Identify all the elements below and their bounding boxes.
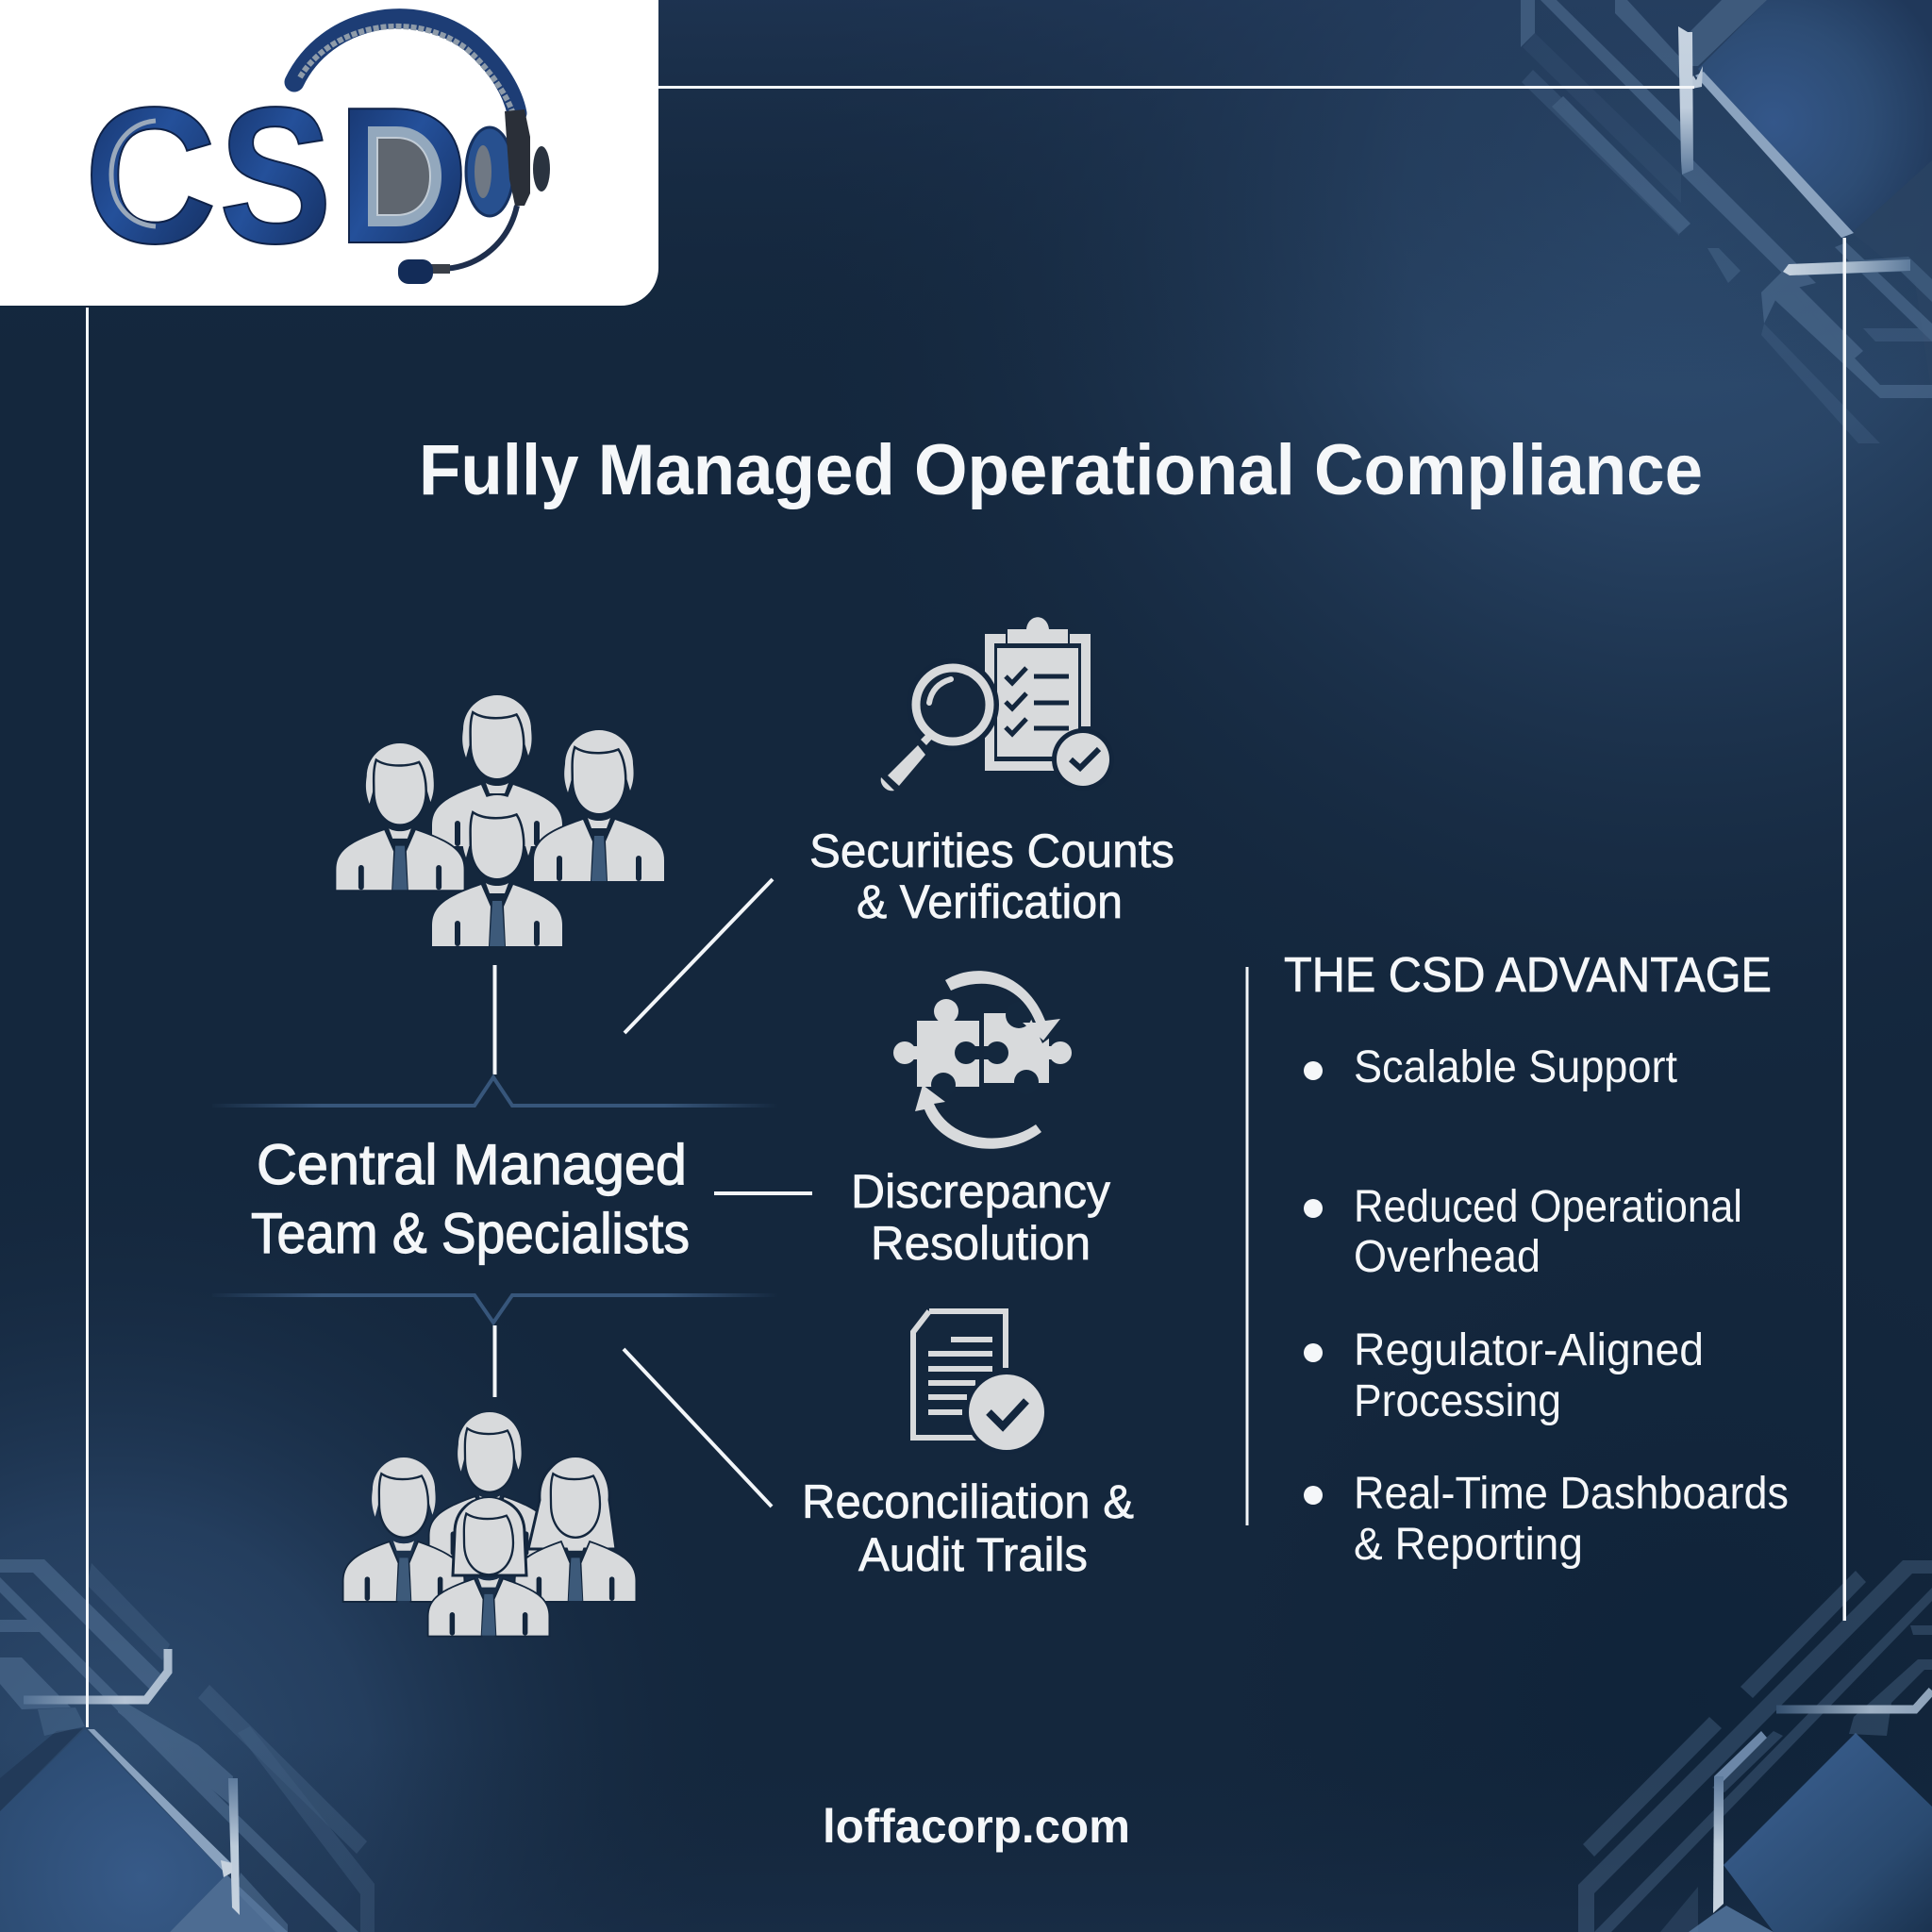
center label (251, 1133, 690, 1265)
bracket: center top (212, 1077, 778, 1106)
label: securities: & Verification (857, 875, 1123, 928)
connector: top team to center (492, 965, 496, 1074)
connector: center to discrepancy (714, 1191, 812, 1195)
center label: Team & Specialists (251, 1202, 690, 1265)
list item: dashboards: Real-Time Dashboards (1354, 1469, 1789, 1519)
title: Fully Managed Operational Compliance (419, 430, 1703, 510)
logo: D counter overlay (368, 126, 441, 226)
connector: center to bottom team (492, 1325, 496, 1397)
icon: clipboard and magnifier (881, 617, 1114, 791)
list item: regulator aligned (1304, 1325, 1704, 1426)
label: reconciliation: Reconciliation & (802, 1475, 1134, 1528)
list item: regulator aligned: Regulator-Aligned (1354, 1325, 1704, 1375)
corner decoration: top right (1521, 0, 1932, 443)
icon: team group bottom (344, 1412, 635, 1636)
corner decoration: bottom right (1578, 1560, 1932, 1932)
logo: CSD letters (84, 67, 469, 284)
list item: reduced overhead: Overhead (1354, 1232, 1541, 1282)
logo: mic (398, 206, 517, 284)
list item: scalable support: Scalable Support (1354, 1042, 1677, 1092)
list item: regulator aligned: Processing (1354, 1376, 1561, 1426)
logo: CSD letters: S (219, 67, 332, 284)
label: discrepancy: Resolution (871, 1217, 1091, 1270)
list item: reduced overhead (1304, 1182, 1742, 1282)
label: securities: Securities Counts (809, 824, 1174, 877)
frame lines (86, 86, 1846, 1727)
corner decoration: bottom left (0, 1559, 375, 1932)
label: discrepancy: Discrepancy (851, 1165, 1110, 1218)
icon: puzzle with arrows (893, 971, 1072, 1149)
label: reconciliation (802, 1475, 1134, 1581)
center label: Central Managed (257, 1133, 687, 1196)
divider: advantage column (1245, 967, 1249, 1525)
list item: dashboards: & Reporting (1354, 1520, 1583, 1570)
footer url: loffacorp.com (823, 1800, 1130, 1853)
heading: advantage: THE CSD ADVANTAGE (1284, 948, 1772, 1003)
logo: CSD letters: C (84, 67, 217, 284)
logo: headset band (294, 19, 517, 113)
label: discrepancy (851, 1165, 1110, 1270)
panel: the CSD advantage (1284, 948, 1789, 1570)
icon: document with check (913, 1311, 1048, 1454)
label: securities (809, 824, 1174, 928)
connector: center to securities (625, 879, 773, 1033)
list item: reduced overhead: Reduced Operational (1354, 1182, 1742, 1232)
label: reconciliation: Audit Trails (858, 1528, 1088, 1581)
logo: CSD letters: D (337, 67, 469, 284)
logo: letter highlights (111, 121, 156, 226)
logo: earcup (466, 109, 550, 216)
connector: center to reconciliation (624, 1349, 772, 1507)
bracket: center bottom (212, 1295, 778, 1323)
list item: dashboards (1304, 1469, 1789, 1570)
panel: logo (0, 0, 658, 306)
icon: team group top (336, 695, 664, 946)
